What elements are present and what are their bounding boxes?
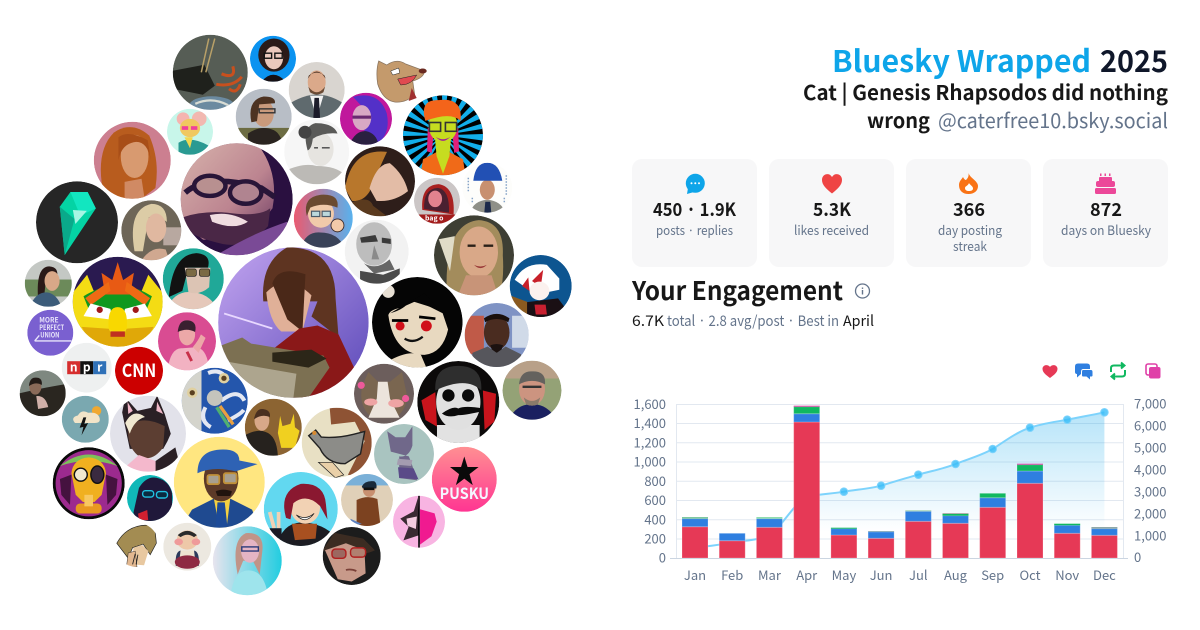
heading: your engagement: Your Engagement: [631, 271, 843, 308]
avatar: man with glasses outdoors: [236, 89, 292, 145]
cumulative line: [695, 412, 1104, 548]
title: Bluesky Wrapped: [832, 37, 1091, 81]
right axis labels: 5,000: [1134, 438, 1166, 456]
stat card: posts and replies: [632, 159, 757, 267]
left axis labels: 1,000: [634, 452, 666, 470]
display name and handle: wrong: [867, 104, 930, 134]
avatar: long red hair portrait: [94, 122, 171, 199]
month labels: Nov: [1055, 565, 1079, 584]
stat card: posts and replies: 450 · 1.9K: [653, 196, 737, 222]
month labels: Jul: [909, 565, 928, 584]
avatar: smiling man with glasses: [181, 141, 293, 255]
avatar: pink toned man: [158, 312, 216, 370]
stacked bars: [682, 406, 1117, 558]
avatar: NPR logo: n: [70, 359, 78, 376]
engagement summary: April: [843, 310, 874, 331]
avatar: man selfie with hoodie: [465, 303, 529, 367]
avatar: pink split character: [393, 496, 445, 548]
avatar: More Perfect Union: PERFECT: [39, 322, 65, 332]
avatar: pencil sketch woman: [284, 119, 349, 184]
right axis labels: 1,000: [1134, 526, 1166, 544]
avatar: woman selfie: [434, 215, 514, 295]
left axis labels: 1,200: [634, 432, 666, 452]
avatar: red hood pinup: [414, 178, 460, 224]
left axis labels: 600: [644, 490, 666, 509]
avatar: round baby character: [163, 523, 211, 571]
month labels: May: [832, 565, 856, 584]
avatar: person on beach: [341, 474, 393, 526]
avatar: cartoon woman with glasses: [250, 36, 296, 82]
avatar: smiling man with glasses in garden: [502, 361, 562, 420]
avatar: grey cat character: [374, 424, 434, 484]
avatar: cat with blush stickers: [354, 364, 414, 424]
icon: flame: [959, 173, 978, 194]
right axis labels: 0: [1134, 547, 1141, 566]
chart legend icons: [1042, 362, 1160, 380]
avatar: gas mask: [53, 447, 125, 519]
avatar: man with mustache and round glasses: [417, 361, 499, 443]
title: 2025: [1100, 37, 1168, 81]
avatar: CNN logo: CNN: [122, 357, 156, 383]
avatar: porcelain donut with googly eyes: [182, 368, 248, 434]
month labels: Aug: [944, 565, 968, 584]
month labels: Mar: [758, 565, 782, 584]
avatar: cartoon man in sunglasses: [163, 248, 224, 309]
display name and handle: [803, 76, 1168, 134]
left axis labels: 0: [659, 548, 666, 566]
avatar: weather icon: [62, 396, 109, 443]
stat card: days on Bluesky: 872: [1090, 196, 1122, 222]
month labels: [684, 565, 1116, 584]
avatar: More Perfect Union: [27, 310, 73, 356]
avatar: charcoal old man: [345, 220, 409, 284]
avatar: man with pikachu: [245, 399, 302, 456]
avatar: turquoise gem on dark: [36, 181, 118, 263]
avatar: sketched rat: [377, 61, 427, 102]
avatar: goth girl: [372, 277, 463, 368]
avatar: woman with cyan lighting: [213, 526, 282, 595]
display name and handle: @caterfree10.bsky.social: [938, 104, 1168, 134]
engagement summary: 6.7K: [632, 310, 665, 331]
month labels: Sep: [981, 565, 1004, 584]
stat card: posting streak: day posting: [938, 220, 1003, 239]
engagement combo chart: [634, 394, 1166, 584]
avatar: man in dark coat: [20, 370, 66, 416]
display name and handle: Cat | Genesis Rhapsodos did nothing: [803, 76, 1168, 106]
month labels: Oct: [1019, 565, 1041, 584]
avatar: CNN logo: [115, 347, 163, 395]
line markers: [840, 408, 1108, 496]
avatar: man in UVA cap: [174, 437, 265, 528]
right axis labels: [1134, 394, 1166, 566]
stat card: posts and replies: posts · replies: [656, 220, 733, 239]
stat card: likes: 5.3K: [813, 196, 852, 222]
avatar: dragon print: [173, 35, 248, 114]
avatar: Pusku logo: [432, 447, 497, 512]
avatar: man in suit: [289, 62, 345, 118]
avatar bubble cloud: [20, 35, 572, 595]
right axis labels: 2,000: [1134, 504, 1166, 522]
grid: [676, 404, 1124, 558]
avatar: blonde woman: [121, 200, 181, 260]
stat card: days on Bluesky: days on Bluesky: [1061, 220, 1151, 239]
avatar: More Perfect Union: UNION: [40, 329, 59, 339]
right axis labels: 3,000: [1134, 482, 1166, 500]
right axis labels: 7,000: [1134, 394, 1166, 412]
month labels: Apr: [796, 565, 818, 584]
avatar: bowser: [73, 257, 163, 347]
month labels: Jan: [684, 565, 706, 584]
month labels: Dec: [1093, 565, 1116, 584]
stat card: posting streak: [906, 159, 1031, 267]
icon: legend reposts: [1111, 362, 1125, 380]
avatar: NPR logo: [62, 343, 112, 393]
left axis labels: 400: [644, 510, 666, 528]
right axis labels: 6,000: [1134, 416, 1166, 434]
avatar: yellow mouse: [167, 109, 213, 155]
icon: heart: [822, 174, 842, 194]
avatar: woman small portrait: [25, 260, 72, 307]
cumulative area: [695, 412, 1104, 558]
left axis labels: [634, 394, 666, 566]
avatar: red hood pinup: bag o: [425, 212, 443, 222]
stat card: posting streak: 366: [953, 196, 985, 222]
avatar: red-haired anime peace sign: [264, 472, 338, 546]
icon: legend quotes: [1146, 364, 1160, 378]
avatar: chicken drawing: [302, 408, 372, 478]
icon: speech bubble: [686, 174, 705, 194]
left axis labels: 1,600: [634, 394, 666, 413]
stat card: days on Bluesky: [1043, 159, 1168, 267]
right axis labels: 4,000: [1134, 460, 1166, 478]
stat card: posting streak: streak: [953, 236, 988, 255]
avatar: Pusku logo: PUSKU: [440, 482, 489, 504]
stat card: likes: likes received: [794, 220, 869, 239]
engagement summary: total · 2.8 avg/post · Best in: [664, 310, 842, 331]
avatar: hooded character with gun, purple sky: [218, 247, 369, 398]
left axis labels: 200: [644, 528, 666, 548]
avatar: NPR logo: p: [83, 359, 91, 376]
avatar: woman with red glasses: [323, 527, 381, 585]
icon: legend replies: [1075, 364, 1092, 380]
avatar: green woman sunburst: [403, 95, 483, 175]
avatar: magenta glitch portrait: [340, 93, 392, 145]
left axis labels: 800: [644, 471, 666, 490]
avatar: darth vader cartoon: [127, 475, 173, 521]
avatar: More Perfect Union: MORE: [39, 315, 59, 325]
avatar: auburn hair portrait: [345, 146, 415, 216]
stat card: likes: [769, 159, 894, 267]
avatar: cartoon man adjusting glasses: [294, 189, 353, 248]
icon: legend heart: [1042, 365, 1058, 378]
avatar: white hair anime: [510, 255, 572, 317]
avatar: NPR logo: r: [97, 359, 103, 376]
avatar: blond manga character: [115, 523, 159, 567]
icon: birthday cake: [1095, 174, 1116, 194]
avatar: man in party hat: [468, 162, 508, 213]
month labels: Jun: [870, 565, 892, 584]
month labels: Feb: [721, 565, 743, 584]
avatar: cat-eared man: [110, 396, 186, 472]
left axis labels: 1,400: [634, 413, 666, 432]
icon: info: [856, 284, 870, 298]
